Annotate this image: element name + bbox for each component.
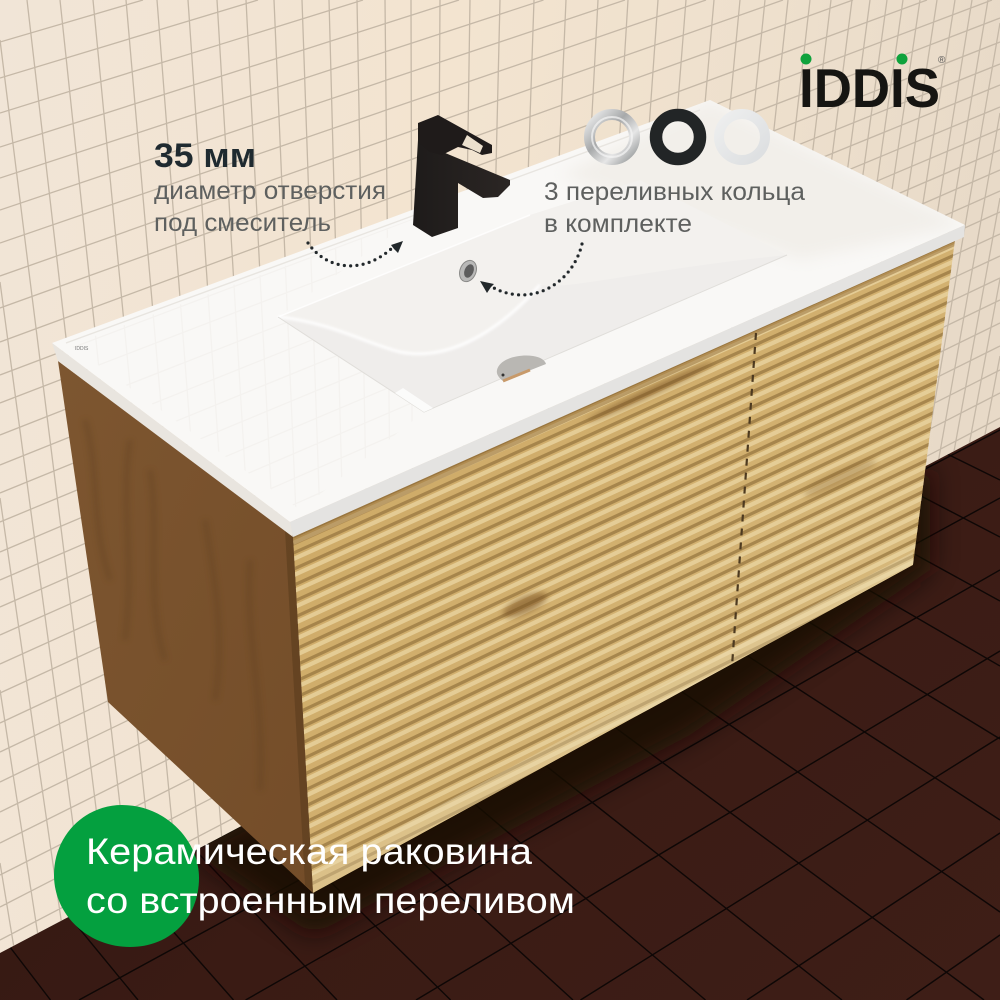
ceramic countertop basin <box>52 100 965 537</box>
small logo on counter: IDDIS <box>75 346 89 352</box>
cabinet side panel: dark wood <box>58 361 315 893</box>
callout: 3 overflow rings: 3 переливных кольца <box>544 178 805 206</box>
wood knots <box>500 359 879 622</box>
drain <box>497 356 546 381</box>
headline: Керамическая раковина <box>86 831 532 872</box>
description: диаметр отверстия <box>154 177 386 205</box>
overflow rings set <box>590 114 765 160</box>
callout: 3 overflow rings: в комплекте <box>544 210 692 238</box>
basin recess <box>278 180 787 412</box>
callout: 35 mm hole diameter <box>154 137 393 237</box>
vanity cabinet <box>58 240 955 893</box>
ring: black <box>656 115 700 159</box>
headline: со встроенным переливом <box>86 880 575 921</box>
back ledge <box>66 110 700 343</box>
arrow: to faucet hole <box>308 241 403 266</box>
cabinet front: ribbed oak doors <box>293 240 955 893</box>
description: под смеситель <box>154 209 331 237</box>
green circle <box>54 805 199 947</box>
logo: IDDIS: IDDIS <box>799 57 940 119</box>
door gap <box>732 333 756 666</box>
overflow hole <box>456 258 480 284</box>
arrow: to overflow hole <box>480 244 582 295</box>
ring: chrome <box>590 114 634 160</box>
black faucet <box>413 115 510 237</box>
counter front edges <box>52 225 965 537</box>
logo: IDDIS: ® <box>938 55 946 66</box>
value: 35 мм <box>154 137 256 175</box>
ring: white <box>719 114 765 160</box>
